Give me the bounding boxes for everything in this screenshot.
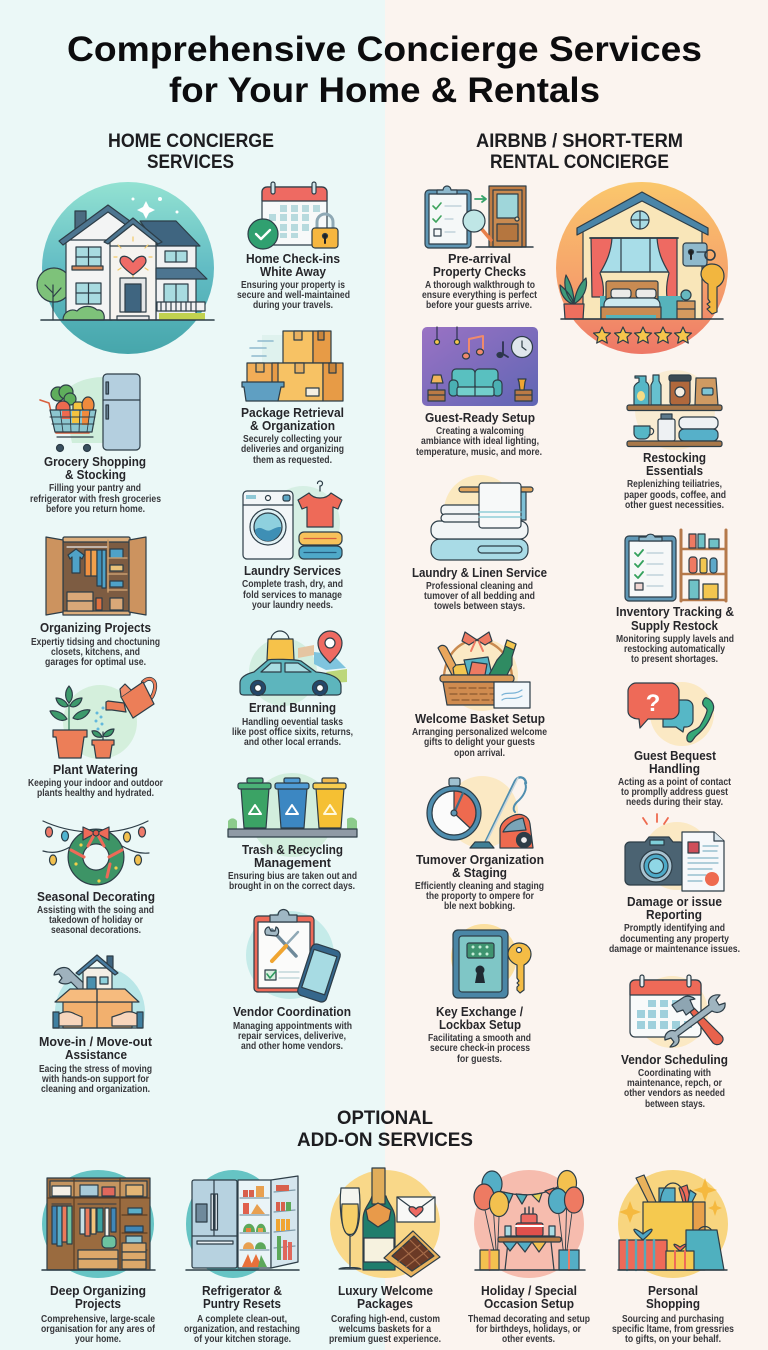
text: move-in assistance: cleaning and organization. [41, 1083, 150, 1095]
text: package retrieval: & Organization [250, 418, 335, 433]
text: home check-ins: Home Check-ins [246, 251, 340, 266]
heading: optional add-ons: ADD-ON SERVICES [297, 1129, 473, 1151]
text: welcome basket: gifts to delight your guests [424, 736, 535, 748]
text: laundry and linen: tumover of all bedding and [424, 590, 535, 602]
panel: deep organizing [41, 1170, 155, 1345]
text: pre-arrival checks: Pre-arrival [448, 251, 511, 266]
title: for Your Home & Rentals [169, 71, 600, 110]
text: plant watering: Plant Watering [53, 762, 138, 777]
panel: move-in assistance [39, 955, 153, 1095]
text: move-in assistance: with hands-on support for [41, 1073, 149, 1085]
panel: key exchange [428, 924, 531, 1065]
panel: vendor scheduling [621, 975, 728, 1110]
text: restocking essentials: Essentials [646, 463, 703, 478]
text: errand running: and other local errands. [244, 736, 341, 748]
text: damage reporting: Promptly identifying and [624, 922, 725, 934]
icon: car with bag and map [240, 631, 347, 706]
text: guest request handling: needs during their stay. [626, 796, 723, 808]
text: key exchange: Facilitating a smooth and [428, 1032, 531, 1044]
text: move-in assistance: Move-in / Move-out [39, 1034, 153, 1049]
text: holiday setup [468, 1283, 590, 1345]
text: guest-ready setup: Creating a walcoming [436, 425, 524, 437]
text: vendor coordination: Vendor Coordination [233, 1004, 351, 1019]
text: trash and recycling [228, 842, 357, 892]
text: organizing projects: Expertiy tidsing and choctuning [31, 636, 160, 648]
panel: holiday setup [468, 1170, 590, 1345]
text: restocking essentials: other guest necessities. [625, 499, 724, 511]
icon: shopping bags and gifts [618, 1170, 728, 1278]
text: package retrieval: Package Retrieval [241, 405, 344, 420]
text: inventory tracking [616, 604, 734, 665]
icon: calendar and tools [630, 975, 725, 1048]
text: errand running: like post office sixits, returns, [232, 726, 353, 738]
icon: recycling bins [228, 773, 357, 857]
text: vendor scheduling: Vendor Scheduling [621, 1052, 728, 1067]
text: vendor scheduling: between stays. [645, 1098, 705, 1110]
panel: laundry services [242, 481, 343, 611]
title [67, 30, 702, 110]
text: laundry and linen: Laundry & Linen Service [412, 565, 547, 580]
text: turnover organization: Tumover Organization [416, 852, 544, 867]
panel: guest-ready setup [416, 327, 542, 458]
text: holiday setup: Holiday / Special [481, 1283, 577, 1298]
title: Comprehensive Concierge Services [67, 30, 702, 69]
text: seasonal decorating: Assisting with the soing and [37, 904, 154, 916]
text: deep organizing: Deep Organizing [50, 1283, 146, 1298]
panel: seasonal decorating [37, 821, 155, 936]
icon: champagne, card and chocolates [330, 1168, 440, 1278]
text: holiday setup: Occasion Setup [484, 1296, 574, 1311]
heading: optional add-ons: OPTIONAL [337, 1107, 433, 1129]
text: vendor scheduling [621, 1052, 728, 1110]
text: trash and recycling: Ensuring bius are taken out and [228, 870, 357, 882]
icon: calendar with lock [248, 182, 338, 249]
text: home check-ins: White Away [260, 264, 327, 279]
text: refrigerator resets [184, 1283, 300, 1345]
icon: open refrigerator [186, 1170, 299, 1278]
text: plant watering [28, 762, 163, 799]
text: home check-ins: Ensuring your property is [241, 279, 345, 291]
text: guest request handling [618, 748, 731, 808]
text: key exchange: secure check-in process [430, 1042, 530, 1054]
text: key exchange: Key Exchange / [436, 1004, 523, 1019]
text: guest request handling: Acting as a point of contact [618, 776, 731, 788]
icon: checklist and supply shelf [625, 530, 726, 601]
text: welcome basket: Welcome Basket Setup [415, 711, 545, 726]
icon: packages [242, 331, 343, 401]
text: welcome basket: opon arrival. [454, 747, 505, 759]
text: restocking essentials: paper goods, coffee, and [624, 489, 726, 501]
text: move-in assistance: Eacing the stress of moving [39, 1063, 152, 1075]
panel: guest request handling [618, 682, 731, 808]
panel: personal shopping [612, 1170, 734, 1345]
text: laundry and linen: Professional cleaning and [426, 580, 533, 592]
heading: airbnb concierge: RENTAL CONCIERGE [490, 151, 669, 173]
panel: turnover organization [415, 776, 544, 912]
text: luxury welcome packages: premium guest experience. [329, 1333, 441, 1345]
panel: grocery shopping [30, 374, 161, 515]
panel: luxury welcome packages [329, 1168, 441, 1345]
text: laundry services: your laundry needs. [252, 599, 333, 611]
text: vendor coordination: Managing appointments with [233, 1020, 352, 1032]
text: personal shopping: to gifts, on your behalf. [625, 1333, 721, 1345]
panel: welcome basket [412, 632, 547, 759]
text: laundry and linen [412, 565, 547, 612]
text: vendor coordination [233, 1004, 352, 1052]
icon: moving box [53, 955, 145, 1028]
icon: gift basket [438, 632, 530, 711]
text: luxury welcome packages: Luxury Welcome [338, 1283, 433, 1298]
heading: home concierge: HOME CONCIERGE [108, 130, 274, 152]
text: guest-ready setup: ambiance with ideal lighting, [421, 435, 539, 447]
text: personal shopping [612, 1283, 734, 1345]
icon: lockbox and key [451, 924, 531, 998]
text: package retrieval: deliveries and organizing [241, 443, 344, 455]
text: grocery shopping [30, 454, 161, 515]
text: plant watering: Keeping your indoor and outdoor [28, 777, 163, 789]
text: home check-ins: secure and well-maintained [237, 289, 350, 301]
panel: inventory tracking [616, 530, 734, 665]
icon: clipboard tools phone [246, 910, 342, 1003]
text: grocery shopping: Grocery Shopping [44, 454, 146, 469]
icon: stocked shelves [627, 370, 722, 450]
text: vendor scheduling: Coordinating with [638, 1067, 711, 1079]
text: pre-arrival checks: Property Checks [433, 264, 526, 279]
text: luxury welcome packages: Corafing high-end, custom [331, 1313, 440, 1325]
text: move-in assistance [39, 1034, 153, 1095]
text: personal shopping: Sourcing and purchasing [622, 1313, 724, 1325]
text: damage reporting: damage or maintenance issues. [609, 943, 740, 955]
text: errand running: Errand Bunning [249, 700, 336, 715]
text: luxury welcome packages: welcums baskets for a [338, 1323, 431, 1335]
text: deep organizing: Comprehensive, large-scale [41, 1313, 155, 1325]
panel: home check-ins [237, 182, 350, 311]
text: guest request handling: Guest Bequest [634, 748, 717, 763]
text: turnover organization: ble next bobking. [444, 900, 515, 912]
text: damage reporting: documenting any property [620, 933, 729, 945]
text: damage reporting: Reporting [646, 907, 702, 922]
text: organizing projects: closets, kitchens, and [51, 646, 140, 658]
text: seasonal decorating: Seasonal Decorating [37, 889, 155, 904]
text: personal shopping: specific ltame, from gressries [612, 1323, 734, 1335]
text: turnover organization: the proporty to ompere for [426, 890, 534, 902]
text: package retrieval [241, 405, 344, 466]
text: guest-ready setup [416, 410, 542, 458]
text: guest request handling: to promplly address guest [621, 786, 728, 798]
text: laundry and linen: towels between stays. [434, 600, 525, 612]
text: key exchange [428, 1004, 531, 1065]
text: laundry services: Laundry Services [244, 563, 341, 578]
text: inventory tracking: Supply Restock [631, 618, 719, 633]
panel: organizing projects [31, 537, 160, 668]
text: holiday setup: for birthdeys, holidays, or [476, 1323, 581, 1335]
hero icon: rental bedroom and key [556, 182, 728, 354]
text: personal shopping: Personal [648, 1283, 698, 1298]
icon: plants and watering can [50, 679, 155, 759]
panel: plant watering [28, 679, 163, 799]
text: refrigerator resets: organization, and restaching [184, 1323, 300, 1335]
text: grocery shopping: & Stocking [65, 467, 126, 482]
text: laundry services [242, 563, 343, 611]
text: plant watering: plants healthy and hydrated. [37, 787, 154, 799]
text: deep organizing: Projects [75, 1296, 121, 1311]
text: trash and recycling: Management [254, 855, 332, 870]
panel: vendor coordination [233, 910, 352, 1052]
icon: cart and fridge [40, 374, 140, 452]
text: damage reporting: Damage or issue [627, 894, 722, 909]
text: pre-arrival checks: ensure everything is perfect [422, 289, 537, 301]
panel: restocking essentials [624, 370, 726, 511]
text: inventory tracking: restocking automatically [624, 643, 725, 655]
text: restocking essentials [624, 450, 726, 511]
text: trash and recycling: Trash & Recycling [242, 842, 343, 857]
text: pre-arrival checks: A thorough walkthrough to [425, 279, 535, 291]
text: laundry services: fold services to manage [243, 589, 342, 601]
text: deep organizing: your home. [75, 1333, 121, 1345]
text: vendor coordination: repair services, deliverive, [238, 1030, 346, 1042]
text: errand running [232, 700, 353, 748]
icon: ambient living room [422, 327, 538, 406]
text: key exchange: Lockbax Setup [439, 1017, 521, 1032]
text: laundry services: Complete trash, dry, and [242, 578, 343, 590]
heading: home concierge [108, 130, 274, 173]
text: trash and recycling: brought in on the correct days. [229, 880, 355, 892]
text: turnover organization [415, 852, 544, 912]
icon: wardrobe [42, 1170, 155, 1278]
text: welcome basket: Arranging personalized welcome [412, 726, 547, 738]
panel: refrigerator resets [184, 1170, 300, 1345]
text: organizing projects: garages for optimal use. [45, 656, 146, 668]
text: home check-ins: during your travels. [253, 299, 333, 311]
heading: airbnb concierge: AIRBNB / SHORT-TERM [476, 130, 683, 152]
icon: camera and report [625, 814, 724, 891]
text: organizing projects [31, 620, 160, 668]
text: refrigerator resets: Refrigerator & [202, 1283, 282, 1298]
text: guest-ready setup: temperature, music, and more. [416, 446, 542, 458]
panel: pre-arrival checks [422, 186, 537, 311]
icon: open closet [46, 537, 146, 615]
text: inventory tracking: to present shortages. [631, 653, 718, 665]
text: turnover organization: Efficiently cleaning and staging [415, 880, 544, 892]
panel: package retrieval [241, 331, 344, 466]
text: seasonal decorating: seasonal decorations. [51, 924, 141, 936]
text: luxury welcome packages [329, 1283, 441, 1345]
text: inventory tracking: Inventory Tracking & [616, 604, 734, 619]
text: damage reporting [609, 894, 740, 955]
icon: wreath and lights [43, 821, 149, 883]
text: turnover organization: & Staging [452, 865, 507, 880]
text: pre-arrival checks: before your guests arrive. [426, 299, 532, 311]
panel: trash and recycling [228, 773, 357, 892]
text: key exchange: for guests. [457, 1053, 502, 1065]
text: package retrieval: them as requested. [253, 454, 332, 466]
text: deep organizing: organisation for any ares of [41, 1323, 155, 1335]
text: welcome basket [412, 711, 547, 759]
icon: party table and balloons [474, 1170, 585, 1278]
text: guest-ready setup: Guest-Ready Setup [425, 410, 535, 425]
heading: airbnb concierge [476, 130, 683, 173]
text: vendor scheduling: maintenance, repch, or [627, 1077, 722, 1089]
text: refrigerator resets: A complete clean-out, [197, 1313, 287, 1325]
text: luxury welcome packages: Packages [357, 1296, 413, 1311]
icon: speech bubbles and phone: ? [646, 690, 660, 717]
text: holiday setup: other events. [502, 1333, 555, 1345]
text: home check-ins [237, 251, 350, 311]
text: deep organizing [41, 1283, 155, 1345]
panel: laundry and linen [412, 475, 547, 612]
text: guest request handling: Handling [649, 761, 700, 776]
text: package retrieval: Securely collecting your [243, 433, 342, 445]
panel: damage reporting [609, 814, 740, 955]
panel: errand running [232, 631, 353, 748]
icon: clipboard, magnifier and door [425, 186, 533, 248]
text: restocking essentials: Replenizhing teiliatries, [627, 478, 722, 490]
heading: home concierge: SERVICES [147, 151, 234, 173]
text: errand running: Handling oevential tasks [242, 716, 343, 728]
text: vendor scheduling: other vendors as needed [624, 1087, 725, 1099]
hero icon: home with heart [37, 182, 214, 354]
icon: folded linens [431, 475, 533, 560]
heading: optional add-ons [297, 1107, 473, 1151]
text: restocking essentials: Restocking [643, 450, 706, 465]
text: refrigerator resets: of your kitchen storage. [194, 1333, 291, 1345]
text: grocery shopping: Filling your pantry and [49, 482, 141, 494]
text: inventory tracking: Monitoring supply lavels and [616, 633, 734, 645]
text: seasonal decorating: takedown of holiday or [49, 914, 143, 926]
icon: washer and clothes [243, 481, 342, 560]
text: organizing projects: Organizing Projects [40, 620, 151, 635]
text: grocery shopping: before you return home. [46, 503, 145, 515]
text: vendor coordination: and other home vendors. [241, 1040, 343, 1052]
text: holiday setup: Themad decorating and setup [468, 1313, 590, 1325]
text: personal shopping: Shopping [646, 1296, 700, 1311]
text: grocery shopping: refrigerator with fresh groceries [30, 493, 161, 505]
text: move-in assistance: Assistance [65, 1047, 127, 1062]
text: pre-arrival checks [422, 251, 537, 311]
icon: timer and vacuum [427, 776, 533, 848]
text: seasonal decorating [37, 889, 155, 936]
text: refrigerator resets: Puntry Resets [203, 1296, 281, 1311]
